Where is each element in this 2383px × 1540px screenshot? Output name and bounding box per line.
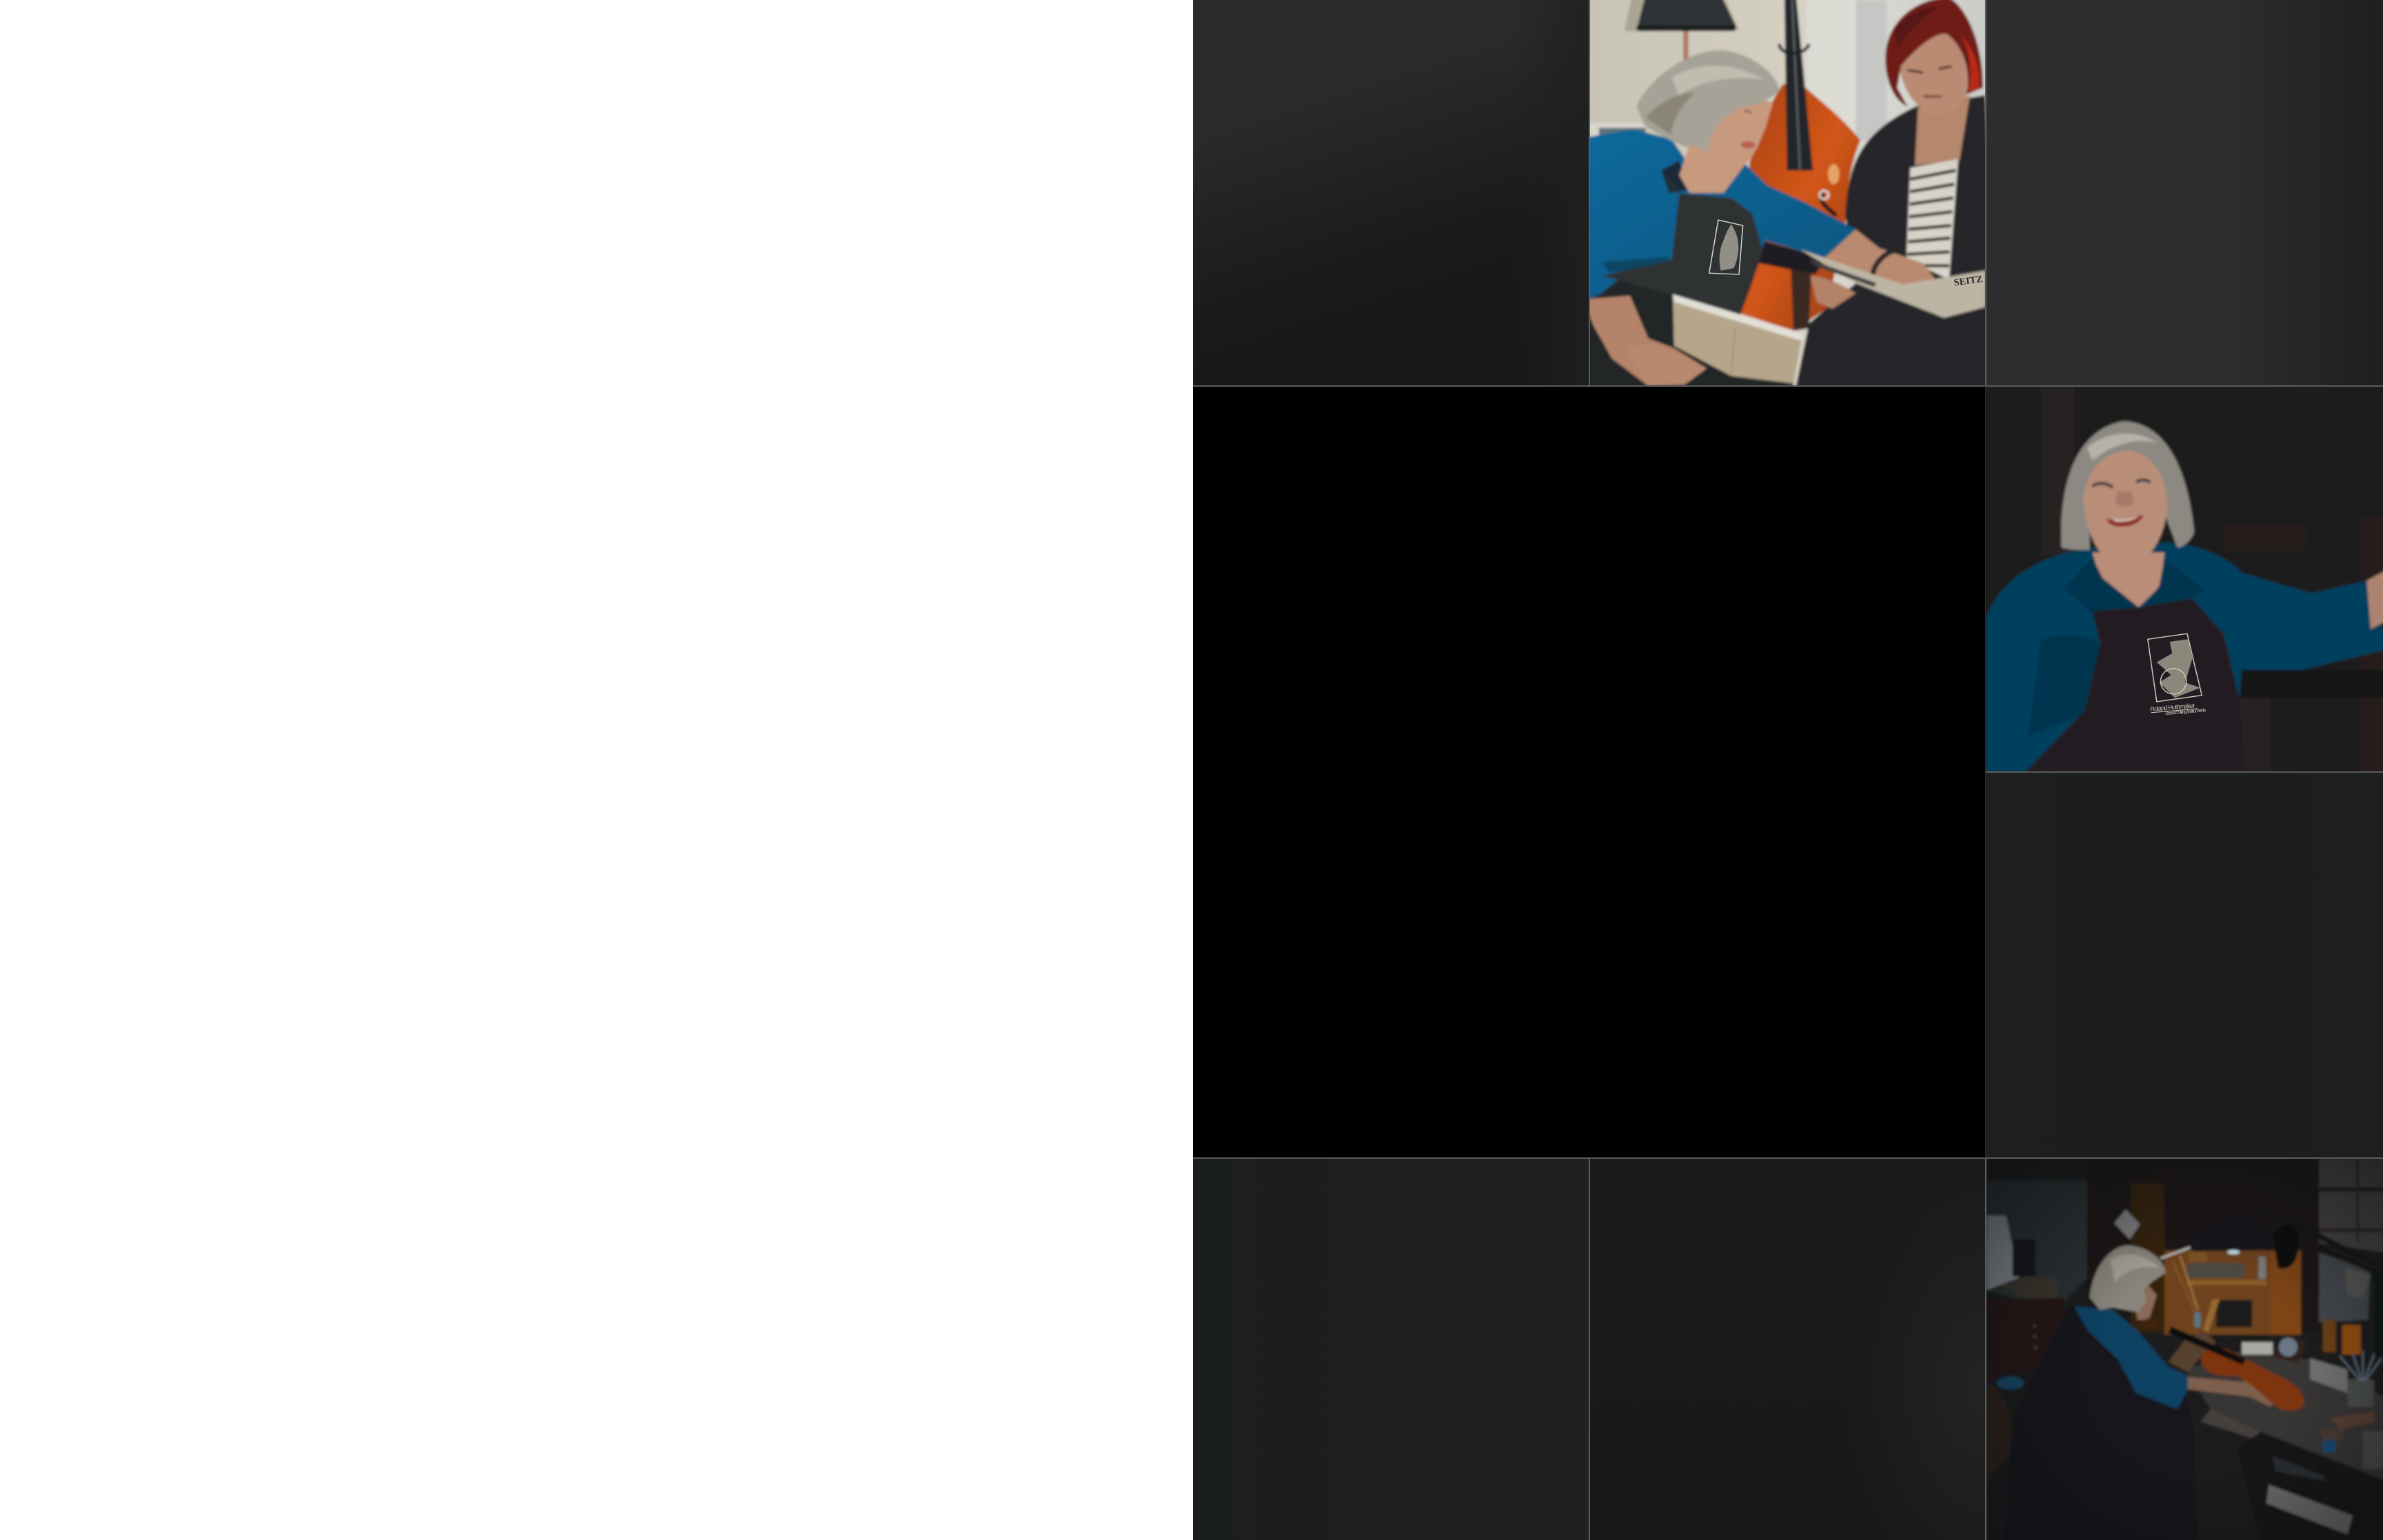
panel: large solid black block: [1193, 386, 1986, 1158]
open sheet music booklet: [1800, 250, 1985, 318]
dim room background: [1974, 374, 2383, 784]
left woman grey hair: [1636, 50, 1779, 152]
hand at right edge: [2366, 569, 2383, 629]
blank white left panel: [0, 0, 1193, 1540]
black apron: [2025, 598, 2246, 772]
left woman lower apron and lap: [1583, 265, 1793, 398]
apron logo: Roland Huthmaker: [2150, 702, 2195, 713]
panel: dark gradient tile top right: [1986, 0, 2383, 386]
panel: dark tile right middle: [1986, 772, 2383, 1158]
violin: [2143, 1318, 2304, 1410]
woman head: [2090, 1246, 2166, 1320]
blue shirt: [1987, 543, 2383, 772]
workshop background: [1974, 1146, 2383, 1540]
apron body: [1602, 173, 1763, 318]
apron logo: [2148, 634, 2206, 716]
apron logo: Bowed String Instruments: [2165, 708, 2206, 716]
booklet on lap: [1627, 294, 1802, 386]
left shelves, whiteboard and drawers: [1987, 1210, 2140, 1483]
apron logo line art: [1709, 220, 1743, 274]
wall background: [1580, 0, 1998, 398]
dark vignette over workshop: [1979, 1151, 2383, 1540]
desk lamp: [2160, 1206, 2383, 1357]
text on booklet cover: SEITZ: [1953, 274, 1984, 288]
panel: dark gradient tile top left: [1193, 0, 1589, 386]
double bass: [1739, 0, 1860, 331]
right woman cardigan and lap: [1793, 95, 1998, 398]
panel: portrait of smiling woman in apron: [1986, 386, 2383, 772]
grid lines: [1193, 0, 2383, 1540]
left woman blue shirt: [1583, 129, 1856, 299]
arms holding violin: [2169, 1331, 2280, 1406]
left woman face and chest: [1679, 99, 1772, 193]
workbench: [2185, 1352, 2383, 1540]
bench clutter: [2172, 1255, 2383, 1468]
grey hair: [2061, 421, 2194, 550]
panel: dark tile bottom left: [1193, 1158, 1589, 1540]
panel: photo of woman inspecting a violin at a workbench: [1986, 1158, 2383, 1540]
woman body and blue shirt: [2004, 1305, 2198, 1540]
table lamp: [1625, 0, 1739, 60]
panel: dark tile bottom middle: [1589, 1158, 1986, 1540]
panel: photo of two women reading sheet music by a double bass: [1589, 0, 1986, 386]
left woman forearms and hands: [1583, 230, 1936, 386]
right woman head with red hair: [1885, 0, 1983, 116]
face: [2083, 451, 2167, 567]
neck and chest: [2064, 553, 2206, 616]
